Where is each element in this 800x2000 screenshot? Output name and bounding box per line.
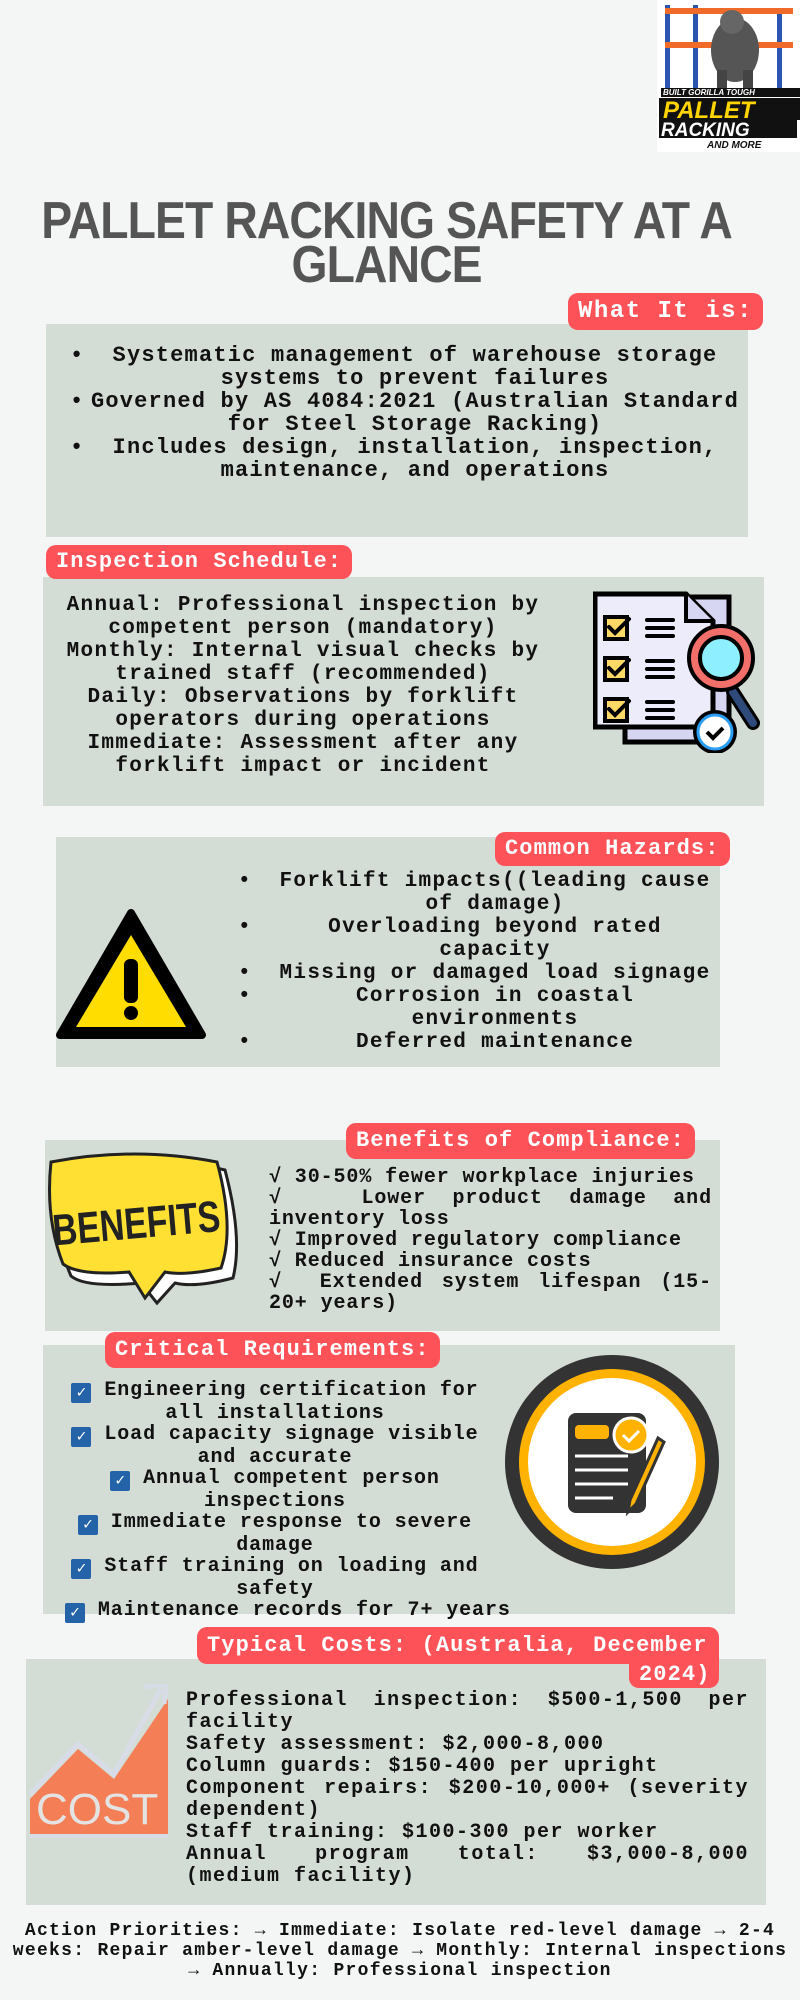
text: what it is list <box>73 343 739 483</box>
text: benefits list: √ Improved regulatory compliance <box>269 1229 682 1252</box>
text: requirements list: ✓ <box>77 1384 86 1402</box>
text: cost list: Staff training: $100-300 per worker <box>186 1821 659 1844</box>
panel: critical requirements <box>43 1345 735 1614</box>
logo: RACKING <box>661 120 750 141</box>
text: requirements list: ✓ <box>83 1516 93 1534</box>
title <box>41 192 732 294</box>
text: benefits list: √ Lower product damage and inventory loss <box>269 1187 712 1231</box>
text: cost list: Safety assessment: $2,000-8,000 <box>186 1733 605 1756</box>
tag: common hazards: Common Hazards: <box>505 836 720 861</box>
logo: AND MORE <box>706 140 762 151</box>
panel: benefits <box>45 1140 720 1331</box>
tag: inspection schedule <box>46 545 352 579</box>
icon: document in circle <box>505 1355 719 1569</box>
text: requirements list: ✓ <box>70 1604 80 1622</box>
logo: PALLET <box>663 97 757 124</box>
text: what it is list: Governed by AS 4084:2021 (Australian Standard for Steel Storage Racking) <box>91 389 739 437</box>
panel: what it is <box>46 324 748 537</box>
text: requirements list <box>65 1379 511 1623</box>
tag: what it is: What It is: <box>578 298 753 325</box>
panel: typical costs <box>26 1659 766 1905</box>
tag: typical costs: 2024) <box>639 1662 711 1687</box>
tag: benefits <box>346 1123 695 1159</box>
logo: BUILT GORILLA TOUGH <box>663 88 755 97</box>
text: requirements list: ✓ <box>77 1428 86 1446</box>
text: requirements list: Engineering certification for all installations <box>104 1379 479 1425</box>
text: schedule: Annual: Professional inspection by competent person (mandatory) <box>67 594 539 640</box>
text: requirements list: Maintenance records for 7+ years <box>98 1599 511 1622</box>
tag: typical costs: Typical Costs: (Australia, December <box>207 1633 708 1658</box>
tag: typical costs <box>197 1627 719 1688</box>
text: requirements list: Immediate response to severe damage <box>111 1511 472 1557</box>
text: requirements list: Staff training on loading and safety <box>104 1555 479 1601</box>
title: GLANCE <box>292 236 482 294</box>
text: benefits list: √ Reduced insurance costs <box>269 1250 592 1273</box>
icon: cost chart: COST <box>36 1785 158 1834</box>
tag: critical requirements <box>105 1332 440 1368</box>
text: benefits list: √ Extended system lifespan (15-20+ years) <box>269 1271 712 1315</box>
text: hazards list: Missing or damaged load signage <box>280 962 710 985</box>
text: schedule: Daily: Observations by forklift operators during operations <box>88 686 518 732</box>
logo <box>657 0 800 152</box>
text: hazards list: Corrosion in coastal environments <box>356 985 634 1031</box>
tag: what it is <box>568 293 763 330</box>
text: schedule <box>66 594 539 778</box>
tag: critical requirements: Critical Requirements: <box>115 1337 430 1362</box>
text: cost list: Annual program total: $3,000-8,000 (medium facility) <box>186 1843 749 1888</box>
text: cost list: Column guards: $150-400 per upright <box>186 1755 659 1778</box>
footer: action priorities: weeks: Repair amber-level damage → Monthly: Internal inspections <box>13 1941 787 1961</box>
text: requirements list: ✓ <box>77 1560 86 1578</box>
text: schedule: Monthly: Internal visual checks by trained staff (recommended) <box>67 640 539 686</box>
text: hazards list: Overloading beyond rated capacity <box>328 916 662 962</box>
footer: action priorities: Action Priorities: → Immediate: Isolate red-level damage → 2-4 <box>25 1921 775 1941</box>
tag: inspection schedule: Inspection Schedule: <box>56 549 342 574</box>
icon: warning triangle <box>56 909 206 1039</box>
icon: benefits badge <box>48 1152 238 1306</box>
panel: common hazards <box>56 837 720 1067</box>
icon: cost chart <box>28 1684 168 1838</box>
text: benefits list: √ 30-50% fewer workplace injuries <box>269 1166 695 1189</box>
text: requirements list: Annual competent person inspections <box>143 1467 440 1513</box>
text: hazards list <box>241 870 710 1054</box>
text: requirements list: Load capacity signage visible and accurate <box>104 1423 479 1469</box>
text: cost list: Component repairs: $200-10,000+ (severity dependent) <box>186 1777 749 1822</box>
panel: inspection schedule <box>43 577 764 806</box>
footer: action priorities <box>12 1921 787 1981</box>
icon: checklist with magnifier <box>593 592 760 753</box>
text: cost list: Professional inspection: $500-1,500 per facility <box>186 1689 749 1734</box>
footer: action priorities: → Annually: Professional inspection <box>188 1961 612 1981</box>
text: schedule: Immediate: Assessment after any forklift impact or incident <box>88 732 518 778</box>
tag: common hazards <box>495 832 730 866</box>
title: PALLET RACKING SAFETY AT A <box>41 192 732 250</box>
text: what it is list: Includes design, installation, inspection, maintenance, and operations <box>113 435 717 483</box>
text: hazards list: Forklift impacts((leading cause of damage) <box>280 870 710 916</box>
tag: benefits: Benefits of Compliance: <box>356 1128 685 1153</box>
text: hazards list: Deferred maintenance <box>356 1031 634 1054</box>
text: cost list <box>186 1689 749 1888</box>
text: what it is list: Systematic management of warehouse storage systems to prevent failures <box>113 343 717 391</box>
icon: benefits badge: BENEFITS <box>51 1192 222 1256</box>
text: benefits list <box>269 1166 712 1315</box>
text: requirements list: ✓ <box>115 1472 125 1490</box>
